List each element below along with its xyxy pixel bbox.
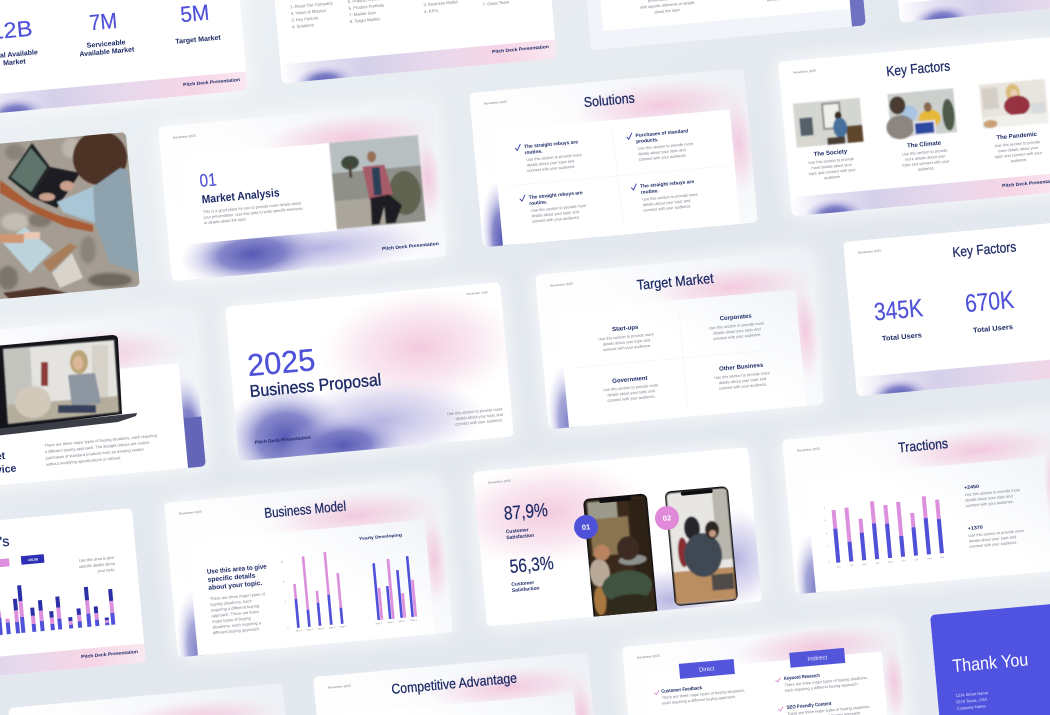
body text: Use this section to provide more	[447, 406, 503, 416]
heading	[207, 563, 269, 592]
heading: about your topic.	[208, 580, 263, 592]
bar chart: stacked: Way 2	[307, 629, 314, 632]
photo: woman with laptop on rug	[0, 131, 140, 302]
body text	[78, 555, 116, 575]
date: November 2025	[179, 510, 202, 516]
contact details: Company Name	[957, 703, 987, 711]
title: Key Factors	[952, 238, 1017, 260]
item: bottom right: Use this section to provide more	[642, 192, 698, 202]
text column: with specific elements or details	[640, 0, 695, 10]
caption: the society: topic and connect with your	[808, 167, 857, 176]
stat: 87,9%	[503, 500, 550, 541]
item: corporates: Corporates	[720, 313, 753, 322]
title: Competitive Advantage	[391, 670, 518, 697]
stacked bar chart: 2	[827, 546, 829, 548]
title: Solutions	[583, 90, 635, 110]
list: indirect: Keyword Research	[784, 673, 820, 682]
contact details	[955, 690, 990, 711]
slide: key factors photos	[778, 37, 1050, 234]
item: top right	[626, 127, 694, 163]
caption: the pandemic: topic and connect with your	[995, 150, 1043, 159]
chip: navy: +20,59	[27, 557, 38, 562]
slide: thank you	[930, 590, 1050, 715]
list: direct: Customer Feedback	[661, 685, 703, 695]
bar chart: grouped: Way 4	[410, 620, 418, 622]
date: November 2025	[858, 249, 881, 255]
body text: without modifying specifications or without.	[46, 455, 122, 467]
stat: 7M	[80, 12, 134, 56]
text panel	[181, 143, 337, 244]
item: top right: Purchases of standard	[635, 128, 688, 139]
stacked bar chart: 0	[829, 562, 831, 564]
list: indirect: There are three major types of buying situations,	[784, 675, 868, 687]
stat: 5M: 5M	[179, 0, 210, 27]
heading: Market Analysis	[201, 187, 280, 206]
caption: the climate: audience.	[918, 165, 935, 172]
caption: the society	[808, 150, 856, 180]
bar chart: stacked: 0	[287, 628, 289, 630]
stacked bar chart	[823, 495, 945, 569]
button: indirect	[789, 648, 845, 668]
item: top left: The straight rebuys are	[524, 139, 579, 150]
date: November 2025	[637, 654, 660, 660]
stat: 670K	[964, 286, 1017, 335]
gradient: purple glow	[219, 367, 491, 494]
chart heading: Yearly Developing	[359, 532, 403, 541]
slide: business model	[164, 478, 462, 712]
white panel	[558, 289, 806, 428]
button: indirect: Indirect	[807, 655, 828, 663]
item: start-ups: details about your topic and	[603, 337, 650, 347]
caption: the society: audience.	[824, 174, 841, 180]
body text: Use this area to give	[79, 555, 114, 563]
slide: kpi chart	[0, 508, 148, 705]
item: start-ups: Use this section to provide more	[598, 332, 654, 342]
item: top left	[514, 140, 582, 172]
white panel	[188, 519, 435, 656]
item: government: connect with your audience.	[607, 394, 656, 403]
button: direct: Direct	[699, 666, 715, 674]
item: corporates: details about your topic and	[713, 326, 761, 336]
item: government: Use this section to provide more	[603, 382, 658, 392]
heading	[0, 449, 17, 478]
caption: the pandemic: audience.	[1010, 157, 1028, 163]
stat: 5M: Target Market	[175, 35, 222, 46]
body text: major types of buying	[212, 615, 252, 624]
stat: 87,9%: 87,9%	[503, 500, 549, 525]
agenda list: 8. Target Market	[349, 16, 381, 24]
bar chart: stacked: Way 1	[296, 630, 303, 633]
item: start-ups: connect with your audience.	[603, 343, 651, 352]
stacked bar chart: Jan	[837, 566, 841, 569]
body text	[203, 200, 303, 225]
bar chart: stacked: 4	[285, 601, 287, 603]
bar chart: stacked: 8	[283, 581, 285, 584]
body text: different buying approach.	[213, 626, 260, 635]
caption: the climate: topic and connect with your	[902, 158, 950, 168]
footer label: Pitch Deck Presentation	[183, 77, 240, 87]
item: top right: products.	[636, 137, 659, 145]
stacked bar chart: 8	[824, 507, 826, 509]
slide: two column text	[577, 0, 866, 50]
item: top left: connect with your audience.	[527, 164, 576, 173]
item: start-ups	[597, 324, 655, 352]
caption: the pandemic: Use this section to provide	[994, 139, 1040, 148]
phone 1	[583, 493, 658, 624]
item: other business	[713, 362, 771, 391]
item: bottom left: Use this section to provide more	[531, 203, 586, 213]
badge 02	[654, 505, 680, 531]
date: November 2025	[793, 69, 816, 75]
title: Key Factors	[886, 57, 951, 79]
gradient: pink glow	[438, 452, 656, 575]
stacked bar chart: 6	[825, 520, 827, 522]
bar chart: stacked: Way 3	[318, 628, 325, 631]
caption: the climate: Use this section to provide	[902, 148, 948, 157]
caption: the climate	[902, 141, 950, 171]
list: direct: each requiring a different buying approach.	[662, 694, 736, 706]
note: +1370: Use this section to provide more	[968, 528, 1024, 538]
title: Business Model	[264, 498, 347, 521]
stat: 56,3%	[509, 553, 556, 594]
body text: buying situations, each	[210, 598, 253, 607]
agenda list	[290, 0, 511, 29]
body text: or details about the topic.	[204, 216, 247, 225]
year: 2025	[246, 342, 317, 383]
phone 2	[665, 486, 738, 606]
item: bottom left	[520, 192, 586, 223]
note: +1370	[968, 521, 1025, 549]
item: top left: Use this section to provide more	[526, 152, 582, 162]
stacked bar chart: May	[888, 561, 894, 564]
item: other business: connect with your audience.	[719, 381, 767, 391]
body text: There are three major types of	[210, 591, 266, 601]
stat: 345K	[873, 294, 926, 343]
stacked bar chart: Feb	[850, 565, 855, 567]
gradient: purple glow	[603, 505, 785, 637]
body text: This is a good place for you to provide more details about	[203, 200, 302, 214]
stat: 670K: Total Users	[973, 324, 1013, 335]
chip: navy	[21, 554, 44, 565]
stat: 345K: Total Users	[882, 332, 922, 343]
slide: solutions	[470, 68, 758, 247]
stacked bar chart: Sep	[940, 557, 945, 559]
body text	[210, 591, 269, 635]
contact details: 1234 Street Name	[955, 690, 989, 698]
slide: photo	[0, 132, 140, 299]
caption: the climate: The Climate	[907, 141, 942, 150]
note: +2450: Use this section to provide more	[964, 487, 1020, 497]
white panel	[644, 652, 893, 715]
list: indirect	[775, 668, 871, 715]
item: bottom right	[631, 180, 698, 212]
note: +1370: connect with your audience.	[969, 540, 1018, 549]
agenda list: 3. Vision & Mission	[291, 8, 327, 16]
slide: competitive advantage	[313, 652, 606, 715]
slide: bottom left partial	[8, 683, 297, 715]
stat: 5M	[175, 4, 221, 44]
date: November 2025	[550, 282, 573, 288]
item: bottom right: details about your topic and	[643, 198, 690, 207]
body text: purchases of standard products from an existing vendor	[45, 446, 145, 460]
note: +1370: details about your topic and	[969, 534, 1017, 543]
badge 01	[573, 514, 599, 540]
list: direct: There are three major types of buying situations,	[662, 688, 745, 700]
bar chart: stacked: Way 4	[329, 627, 336, 630]
body text	[447, 406, 504, 427]
item: top left: routine.	[524, 149, 543, 156]
laptop photo	[0, 335, 137, 436]
slide: market size	[0, 0, 248, 113]
chip: pink	[0, 558, 10, 568]
item: bottom left: The straight rebuys are	[528, 190, 583, 201]
stat: 345K: 345K	[873, 294, 924, 326]
white panel	[493, 109, 740, 246]
stat: 87,9%: Customer	[506, 527, 529, 535]
stat: 56,3%: 56,3%	[509, 553, 555, 578]
bar chart: grouped: Way 1	[376, 623, 383, 625]
title: Target Market	[636, 270, 714, 293]
list: indirect: each requiring a different buying approach.	[785, 681, 859, 693]
agenda list: 3. Key Factors	[291, 15, 318, 23]
date: November 2025	[466, 290, 488, 296]
list: direct	[654, 681, 748, 715]
bar chart: grouped: Way 2	[388, 622, 395, 624]
agenda list: 7. Market Size	[349, 10, 377, 17]
stacked bar chart: Apr	[876, 562, 880, 565]
date: November 2025	[484, 100, 507, 106]
badge 01: 01	[581, 522, 591, 532]
white panel	[806, 456, 1050, 593]
bar chart: grouped	[370, 556, 418, 625]
item: bottom left: routine.	[529, 199, 548, 207]
item: other business: Other Business	[719, 363, 764, 373]
caption: the pandemic: The Pandemic	[996, 132, 1038, 142]
stat: 87,9%: Satisfaction	[506, 533, 534, 541]
photo: man on phone	[329, 135, 426, 229]
body text: approach. There are three	[211, 609, 260, 618]
contact details: 5678 Texas, USA	[956, 697, 987, 704]
item: government: Government	[612, 376, 648, 385]
item: top right: connect with your audience.	[638, 153, 687, 162]
slide: customer satisfaction	[438, 441, 785, 651]
stat: 56,3%: Satisfaction	[512, 585, 540, 594]
slide: laptop	[0, 320, 206, 485]
stat: 7M: 7M	[88, 8, 118, 35]
date: November 2025	[488, 479, 511, 485]
bar chart: stacked	[280, 551, 347, 633]
item: bottom right: routine.	[640, 188, 660, 196]
badge 02: 02	[662, 513, 672, 523]
date: November 2025	[173, 134, 196, 140]
body text	[44, 433, 159, 467]
stacked bar chart: Jul	[915, 559, 918, 561]
stat: 56,3%: Customer	[511, 580, 534, 588]
stat: 7M: Available Market	[79, 46, 135, 58]
slide: tractions	[782, 414, 1050, 644]
note: +2450: connect with your audience.	[965, 499, 1014, 508]
section number: 01	[199, 169, 217, 191]
item: bottom right: The straight rebuys are	[640, 179, 695, 190]
item: other business: details about your topic and	[719, 376, 766, 385]
body text: a different buying approach. The straight rebuys are routine	[45, 440, 151, 454]
item: corporates	[708, 312, 765, 341]
photo: the society	[793, 98, 864, 148]
item: start-ups: Start-ups	[612, 325, 639, 333]
heading: Thank You	[952, 649, 1029, 676]
stat: 12B: Market	[3, 58, 27, 67]
item: top right: Use this section to provide more	[637, 141, 693, 151]
footer label: Pitch Deck Presentation	[81, 649, 138, 659]
white panel	[0, 363, 188, 490]
stat: 12B	[0, 21, 38, 66]
agenda list: 4. KPI's	[424, 8, 439, 14]
item: corporates: Use this section to provide more	[709, 320, 764, 330]
caption: the pandemic	[994, 132, 1042, 162]
heading: Use this area to give	[207, 563, 267, 576]
stacked bar chart: Jun	[902, 560, 906, 563]
caption: the climate: more details about your	[905, 153, 946, 162]
slide: partial top right	[898, 0, 1050, 22]
item: bottom left: connect with your audience.	[532, 214, 580, 224]
body text: your presentation. Use this area to write specific elements	[203, 206, 303, 220]
note: +2450: +2450	[964, 484, 980, 491]
photo: the climate	[883, 88, 957, 140]
item: bottom left: details about your topic and	[531, 209, 579, 218]
footer label: Pitch Deck Presentation	[382, 241, 439, 251]
caption: the pandemic: more details about your	[997, 145, 1039, 153]
slide: market analysis	[158, 110, 446, 281]
footer label: Pitch Deck Presentation	[255, 435, 311, 445]
agenda list: 4. Solutions	[292, 22, 314, 29]
slide: business proposal cover	[211, 281, 531, 494]
slide: direct and indirect	[622, 618, 915, 715]
stat: 7M: Serviceable	[86, 39, 126, 50]
item: government	[602, 375, 659, 403]
item: top left: details about your topic and	[527, 158, 574, 168]
note: +2450: details about your topic and	[965, 493, 1013, 503]
item: corporates: connect with your audience.	[713, 332, 762, 341]
body text: specific details about	[79, 561, 116, 569]
bar chart: grouped: Way 3	[398, 621, 406, 623]
stacked bar chart: Mar	[863, 563, 867, 566]
body text: connect with your audience.	[455, 417, 504, 427]
item: bottom right: connect with your audience.	[643, 203, 692, 213]
button: direct	[679, 659, 735, 679]
bar chart: stacked: 12	[281, 561, 284, 564]
text column	[640, 0, 788, 14]
agenda list: 1. About Our Company	[290, 0, 334, 9]
gradient: pink glow	[315, 281, 524, 414]
photo: the pandemic	[979, 79, 1049, 129]
date: November 2025	[797, 447, 820, 453]
stacked bar chart: Aug	[927, 557, 932, 560]
note: +1370: +1370	[968, 525, 983, 532]
body text: situations, each requiring a	[212, 620, 262, 630]
body text: There are these major types of buying situations, each requiring	[44, 433, 157, 448]
stacked bar chart: 4	[826, 533, 828, 535]
body text: requiring a different buying	[211, 603, 260, 613]
stat: 670K: 670K	[964, 286, 1015, 318]
footer label: Pitch Deck Presentation	[492, 44, 549, 54]
slide: key factors numbers	[843, 217, 1050, 414]
slide: target market	[535, 250, 833, 482]
date: November 2025	[328, 684, 351, 690]
heading: specific details	[207, 573, 256, 584]
title: Tractions	[897, 435, 949, 455]
slide: agenda	[274, 0, 556, 83]
item: top right: details about your topic and	[638, 147, 686, 156]
white panel	[337, 693, 584, 715]
agenda list: 6. Product Portfolio	[348, 2, 385, 11]
item: government: details about your topic and	[607, 388, 655, 397]
stacked bar chart	[0, 577, 115, 635]
list: indirect: SEO Friendly Content	[786, 701, 832, 711]
caption: the society: The Society	[813, 149, 848, 158]
title: Business Proposal	[249, 370, 382, 401]
caption: the society: Use this section to provide	[808, 156, 854, 165]
note: +2450	[964, 480, 1021, 508]
text column: about the topic.	[654, 7, 681, 14]
body text: your topic.	[97, 567, 116, 573]
caption: the society: more details about your	[811, 162, 853, 170]
item: other business: Use this section to provide more	[714, 370, 770, 380]
bar chart: stacked: Way 5	[340, 626, 347, 629]
body text: details about your topic and	[455, 412, 503, 421]
